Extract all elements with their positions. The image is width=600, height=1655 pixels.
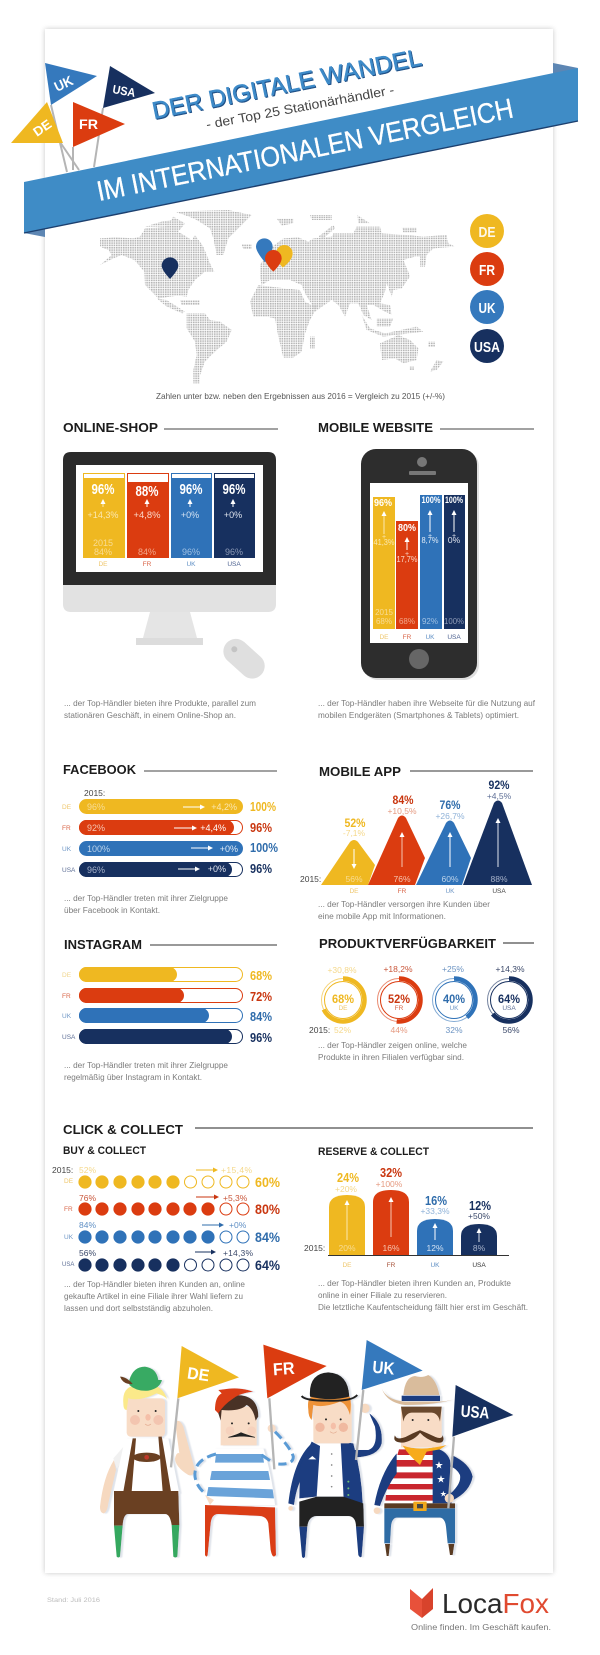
donut: FR: FR <box>395 1005 404 1012</box>
ribbon banner <box>24 63 578 237</box>
flag: UK: UK <box>52 72 75 95</box>
bar: DE <box>83 474 125 568</box>
availability description: ... der Top-Händler zeigen online, welche <box>318 1040 467 1050</box>
character: American: ★ <box>435 1461 444 1472</box>
online-shop description: ... der Top-Händler bieten ihre Produkte, parallel zum <box>64 698 256 708</box>
donut: USA: +14,3% <box>495 964 525 974</box>
row: FR: 76% <box>79 1193 96 1203</box>
pin: USA <box>162 257 178 279</box>
arch: DE: 24% <box>337 1170 359 1185</box>
donut: FR <box>378 964 420 1035</box>
bar: USA: 96% <box>222 481 246 498</box>
row: DE: +15,4% <box>221 1165 252 1175</box>
instagram chart <box>62 967 272 1045</box>
bar: USA: 100% <box>444 617 464 626</box>
row: FR: 80% <box>255 1201 280 1217</box>
bar: FR: 17,7% <box>396 554 418 564</box>
row: USA <box>62 1248 280 1273</box>
row: FR <box>64 1193 280 1217</box>
bar: DE: 2015 <box>93 538 113 548</box>
heading: click and collect: CLICK & COLLECT <box>63 1123 183 1137</box>
row: USA <box>62 1029 272 1045</box>
row: UK: 100% <box>87 844 110 854</box>
monitor illustration <box>63 452 276 684</box>
mobile app chart: 2015: <box>300 874 321 884</box>
instagram description: ... der Top-Händler treten mit ihrer Zielgruppe <box>64 1060 228 1070</box>
row: DE: 52% <box>79 1165 96 1175</box>
row: UK <box>62 1008 272 1024</box>
row: DE: 100% <box>250 799 276 814</box>
heading: mobile website: MOBILE WEBSITE <box>318 421 433 435</box>
availability donuts <box>309 964 530 1035</box>
row: FR: 96% <box>250 820 272 835</box>
row: USA: 56% <box>79 1248 96 1258</box>
arch: UK: 12% <box>426 1243 444 1253</box>
row: UK <box>62 840 278 856</box>
arch: USA <box>461 1198 497 1269</box>
row: UK: 84% <box>255 1229 280 1245</box>
buy and collect description: gekaufte Artikel in eine Filiale ihrer Wahl liefern zu <box>64 1291 243 1301</box>
bar: USA: 0% <box>448 535 461 545</box>
bar: UK: + <box>428 533 432 540</box>
flag: UK: UK <box>372 1357 396 1379</box>
instagram description <box>64 1060 228 1082</box>
arch: DE: DE <box>342 1262 352 1269</box>
triangle: FR: FR <box>398 888 407 895</box>
arch: UK: UK <box>430 1262 440 1269</box>
row: USA: USA <box>62 1262 74 1268</box>
row: USA: USA <box>62 1034 76 1041</box>
map: Americas <box>100 210 252 383</box>
character: American <box>374 1375 473 1556</box>
row: USA: +14,3% <box>223 1248 253 1258</box>
bar: UK: UK <box>186 561 196 568</box>
triangle: DE <box>321 816 375 895</box>
row: USA: 96% <box>250 1030 272 1045</box>
legend: UK: UK <box>478 300 496 317</box>
LocaFox logo: LocaFox <box>442 1588 549 1619</box>
reserve and collect description <box>318 1278 528 1312</box>
donut: USA <box>488 964 530 1035</box>
flag: DE: DE <box>30 116 55 139</box>
heading: mobile app: MOBILE APP <box>319 765 401 779</box>
row: UK: 84% <box>250 1009 272 1024</box>
row: UK: UK <box>64 1234 74 1241</box>
bar: FR: FR <box>143 561 152 568</box>
bar: FR <box>396 521 418 641</box>
mobile website description <box>318 698 536 720</box>
mobile app chart <box>300 778 532 895</box>
donut: DE: 2015: <box>309 1025 330 1035</box>
donut: FR: 44% <box>390 1025 408 1035</box>
flag: USA <box>103 66 155 108</box>
title: DER DIGITALE WANDEL <box>150 44 424 125</box>
row: FR <box>62 820 272 835</box>
row: DE <box>62 799 276 814</box>
arch: FR: +100% <box>376 1179 403 1189</box>
row: UK <box>64 1220 280 1245</box>
arch: DE: 20% <box>338 1243 356 1253</box>
character: German <box>100 1367 195 1557</box>
bar: DE <box>373 497 395 641</box>
triangle: UK: 60% <box>441 874 459 884</box>
donut: UK: 32% <box>445 1025 463 1035</box>
bar: UK <box>171 474 212 568</box>
arch: DE: +20% <box>335 1184 357 1194</box>
characters: DE and FR <box>100 1367 293 1557</box>
triangle: DE: 56% <box>345 874 363 884</box>
bar: UK: 96% <box>180 481 202 498</box>
row: DE: 60% <box>255 1174 280 1190</box>
ribbon banner: IM INTERNATIONALEN VERGLEICH <box>94 93 516 207</box>
row: FR: +4,4% <box>200 823 226 833</box>
mobile app description: eine mobile App mit Informationen. <box>318 911 446 921</box>
triangle: UK <box>416 798 471 895</box>
bar: UK: 8,7% <box>422 535 439 545</box>
smartphone illustration <box>361 449 479 680</box>
row: FR: FR <box>64 1206 73 1213</box>
bar: DE: 96% <box>92 481 114 498</box>
bar: UK: 96% <box>182 547 200 557</box>
row: FR: FR <box>62 825 71 832</box>
legend: USA <box>470 329 504 363</box>
row: USA: +0% <box>208 864 226 874</box>
row: USA: USA <box>62 867 76 874</box>
character: French <box>195 1388 293 1557</box>
dotted world map <box>100 210 455 383</box>
availability description: Produkte in ihren Filialen verfügbar sind. <box>318 1052 464 1062</box>
bar: FR <box>127 474 169 568</box>
header flags <box>11 63 155 172</box>
pin: DE <box>276 245 293 268</box>
row: DE <box>64 1165 280 1190</box>
row: UK: +0% <box>229 1220 247 1230</box>
bar: DE: 84% <box>94 547 112 557</box>
donut: UK <box>432 964 476 1035</box>
buy and collect description: ... der Top-Händler bieten ihren Kunden an, online <box>64 1279 245 1289</box>
bar: FR: +4,8% <box>134 510 160 520</box>
legend: FR: FR <box>479 262 495 279</box>
row: DE: DE <box>64 1178 74 1185</box>
buy and collect dot chart: 2015: <box>52 1165 73 1175</box>
donut: DE <box>309 965 364 1035</box>
triangle: DE: DE <box>349 888 359 895</box>
row: DE <box>62 967 272 983</box>
reserve and collect description: online in einer Filiale zu reservieren. <box>318 1290 447 1300</box>
donut: USA: 64% <box>498 992 520 1006</box>
bar: USA: USA <box>227 561 241 568</box>
arch: FR: FR <box>387 1262 396 1269</box>
country legend <box>470 214 504 363</box>
online-shop description <box>64 698 256 720</box>
bar: DE: DE <box>379 634 389 641</box>
bar: DE: 96% <box>374 497 393 509</box>
bar: FR: FR <box>403 634 412 641</box>
bar: DE: 2015 <box>375 608 393 617</box>
arch: USA: 8% <box>473 1243 486 1253</box>
character: American: ★ <box>437 1474 446 1485</box>
flag: DE: DE <box>186 1363 211 1385</box>
facebook chart: 2015: <box>84 788 105 798</box>
triangle: FR: 84% <box>392 793 414 807</box>
bar: USA: 96% <box>225 547 243 557</box>
row: DE: 68% <box>250 968 272 983</box>
page panel <box>45 29 553 1573</box>
row: FR: +5,3% <box>223 1193 248 1203</box>
arch: DE <box>329 1170 365 1269</box>
triangle: USA: 92% <box>488 778 510 792</box>
arch: USA: +50% <box>468 1211 490 1221</box>
row: USA: 96% <box>87 865 105 875</box>
flag: FR <box>263 1345 327 1398</box>
row: UK: 100% <box>250 840 278 855</box>
flag: USA <box>452 1385 513 1437</box>
row: USA: 64% <box>255 1257 280 1273</box>
triangle: USA: +4,5% <box>487 791 512 801</box>
donut: FR: +18,2% <box>383 964 413 974</box>
donut: DE: 68% <box>332 992 354 1006</box>
pin: UK <box>256 238 273 262</box>
bar: FR: 80% <box>398 522 417 534</box>
LocaFox logo <box>410 1588 551 1632</box>
mobile app description <box>318 899 490 921</box>
reserve and collect bar chart <box>304 1165 509 1269</box>
flag: UK <box>45 63 97 105</box>
character: American: ★ <box>440 1490 447 1499</box>
buy and collect description <box>64 1279 245 1313</box>
online-shop description: stationären Geschäft, in einem Online-Shop an. <box>64 710 236 720</box>
flag: UK <box>362 1340 423 1390</box>
bar: FR: 84% <box>138 547 156 557</box>
triangle: USA: USA <box>492 888 506 895</box>
donut: DE: +30,8% <box>327 965 357 975</box>
bar: UK: UK <box>425 634 435 641</box>
character: British <box>288 1372 382 1558</box>
arch: USA: 12% <box>469 1198 491 1213</box>
bar: USA: +0% <box>224 510 242 520</box>
bar: FR: + <box>405 551 409 558</box>
flag: USA: USA <box>111 82 137 100</box>
triangle: FR: +10,5% <box>387 806 417 816</box>
bar: USA: 100% <box>445 495 463 506</box>
heading: facebook: FACEBOOK <box>63 763 136 777</box>
row: UK: UK <box>62 1013 72 1020</box>
triangle: FR <box>368 793 425 895</box>
title: DER DIGITALE WANDEL <box>151 45 425 126</box>
reserve and collect description: Die letztliche Kaufentscheidung fällt hier erst im Geschäft. <box>318 1302 528 1312</box>
triangle: UK: +26,7% <box>435 811 465 821</box>
donut: DE: DE <box>338 1005 348 1012</box>
legend: FR <box>470 252 504 286</box>
map: Europe, Asia, Africa, Australia <box>250 215 455 372</box>
facebook description: über Facebook in Kontakt. <box>64 905 160 915</box>
triangle: USA <box>463 778 532 895</box>
triangle: DE: 52% <box>344 816 366 830</box>
row: UK: UK <box>62 846 72 853</box>
triangle: DE: -7,1% <box>343 828 366 838</box>
date note: Stand: Juli 2016 <box>47 1597 100 1604</box>
row: DE: DE <box>62 972 72 979</box>
row: DE: +4,2% <box>211 802 237 812</box>
bar: UK: 100% <box>422 495 441 506</box>
mouse <box>218 634 270 684</box>
legend: DE <box>470 214 504 248</box>
donut: USA: 56% <box>502 1025 520 1035</box>
buy and collect description: lassen und dort selbstständig abzuholen. <box>64 1303 213 1313</box>
arch: UK <box>417 1193 453 1269</box>
row: DE: DE <box>62 804 72 811</box>
arch: UK: +33,3% <box>420 1206 450 1216</box>
LocaFox logo: Online finden. Im Geschäft kaufen. <box>411 1622 551 1632</box>
row: UK: +0% <box>220 844 238 854</box>
donut: UK: +25% <box>442 964 464 974</box>
bar: UK: +0% <box>181 510 199 520</box>
bar: DE: 68% <box>376 617 392 626</box>
bar: USA <box>444 495 465 641</box>
reserve and collect description: ... der Top-Händler bieten ihren Kunden an, Produkte <box>318 1278 511 1288</box>
donut: UK: UK <box>449 1005 459 1012</box>
arch: UK: 16% <box>425 1193 447 1208</box>
bar: DE: +14,3% <box>88 510 118 520</box>
legend: USA: USA <box>474 339 500 356</box>
facebook chart <box>62 788 278 877</box>
flag: FR <box>73 102 125 147</box>
subheading: buy and collect: BUY & COLLECT <box>63 1145 146 1157</box>
pin: FR <box>265 250 282 272</box>
mobile website description: mobilen Endgeräten (Smartphones & Tablets) optimiert. <box>318 710 519 720</box>
facebook description: ... der Top-Händler treten mit ihrer Zielgruppe <box>64 893 228 903</box>
row: FR: FR <box>62 993 71 1000</box>
donut: UK: 40% <box>443 992 465 1006</box>
row: DE: 96% <box>87 802 105 812</box>
reserve and collect bar chart: 2015: <box>304 1243 325 1253</box>
mobile website description: ... der Top-Händler haben ihre Webseite für die Nutzung auf <box>318 698 536 708</box>
flag: FR: FR <box>272 1358 296 1379</box>
bar: DE: 41,3% <box>374 537 395 547</box>
heading: produktverfuegbarkeit: PRODUKTVERFÜGBARKEIT <box>319 936 496 951</box>
bar: FR: 88% <box>136 483 158 500</box>
row: USA: 96% <box>250 861 272 876</box>
bar: UK <box>420 495 442 641</box>
triangle: UK: 76% <box>440 798 461 812</box>
bar: UK: 92% <box>422 617 438 626</box>
row: FR <box>62 988 272 1004</box>
row: FR: 72% <box>250 989 272 1004</box>
bar: USA <box>214 474 255 568</box>
row: USA <box>62 861 272 877</box>
bar: USA: USA <box>447 634 461 641</box>
row: FR: 92% <box>87 823 105 833</box>
bar: DE: + <box>382 534 386 541</box>
mobile app description: ... der Top-Händler versorgen ihre Kunden über <box>318 899 490 909</box>
buy and collect dot chart <box>52 1165 280 1273</box>
arch: FR <box>373 1165 409 1269</box>
map caption: Zahlen unter bzw. neben den Ergebnissen aus 2016 = Vergleich zu 2015 (+/-%) <box>156 391 445 401</box>
instagram description: regelmäßig über Instagram in Kontakt. <box>64 1072 202 1082</box>
row: UK: 84% <box>79 1220 96 1230</box>
bar: USA: + <box>452 533 456 540</box>
donut: USA: USA <box>502 1005 516 1012</box>
arch: USA: USA <box>472 1262 486 1269</box>
arch: FR: 32% <box>380 1165 402 1180</box>
flag: DE <box>11 102 63 143</box>
donut: DE: 52% <box>334 1025 351 1035</box>
flag: USA: USA <box>460 1402 490 1423</box>
subtitle: - der Top 25 Stationärhändler - <box>205 82 395 132</box>
flag: FR: FR <box>79 116 98 132</box>
triangle: UK: UK <box>445 888 455 895</box>
availability description <box>318 1040 467 1062</box>
triangle: USA: 88% <box>490 874 508 884</box>
bar: DE: DE <box>98 561 108 568</box>
icon: fox <box>410 1588 433 1618</box>
parade flags <box>171 1340 513 1508</box>
legend: DE: DE <box>478 224 496 241</box>
triangle: FR: 76% <box>393 874 411 884</box>
legend: UK <box>470 290 504 324</box>
characters: UK and USA <box>288 1372 473 1558</box>
flag: DE <box>177 1346 239 1398</box>
facebook description <box>64 893 228 915</box>
arch: FR: 16% <box>382 1243 400 1253</box>
heading: instagram: INSTAGRAM <box>64 938 142 952</box>
map pins <box>162 238 293 279</box>
subheading: reserve and collect: RESERVE & COLLECT <box>318 1146 429 1158</box>
donut: FR: 52% <box>388 992 410 1006</box>
heading: online-shop: ONLINE-SHOP <box>63 421 158 435</box>
bar: FR: 68% <box>399 617 415 626</box>
